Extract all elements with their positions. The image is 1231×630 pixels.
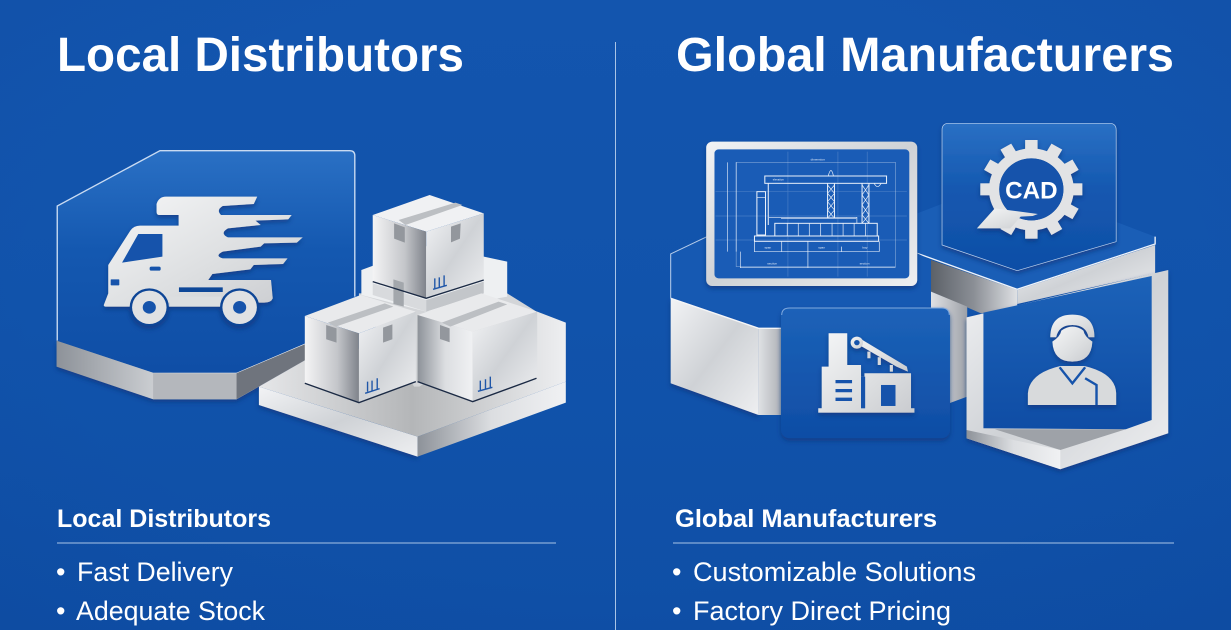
bullet: Adequate Stock: • [56, 596, 65, 626]
bullet: Factory Direct Pricing: Factory Direct Pricing [693, 596, 951, 626]
blueprint labels: elevation [773, 177, 784, 181]
icon: this way up arrows [433, 275, 447, 289]
blueprint labels [764, 158, 870, 266]
icon: CAD gear [977, 140, 1082, 239]
blueprint tablet [706, 142, 917, 286]
left hexagon pedestal [671, 237, 967, 415]
CAD panel [942, 123, 1116, 271]
blueprint drawing [716, 152, 907, 277]
hexagon panel with truck [57, 151, 355, 399]
bullet: Customizable Solutions: Customizable Solutions [693, 557, 976, 587]
icon: this way up arrows [478, 377, 492, 391]
text block: global manufacturers list [672, 505, 1174, 626]
heading: Local Distributors: Local Distributors [57, 29, 464, 82]
icon: delivery truck [104, 197, 303, 326]
upper tier [359, 245, 537, 387]
blueprint labels: bay [862, 245, 868, 249]
blueprint labels: span [818, 245, 825, 249]
icon: this way up arrows [365, 378, 380, 393]
icon: person with headset [1028, 315, 1116, 405]
blueprint labels: section [767, 262, 777, 266]
icon: CAD gear: CAD [1005, 178, 1058, 205]
text block: local distributors list [56, 505, 556, 626]
blueprint labels: span [764, 245, 772, 249]
bullet: Customizable Solutions: • [672, 557, 681, 587]
bullet: Factory Direct Pricing: • [672, 596, 681, 626]
bullet: Fast Delivery: Fast Delivery [77, 557, 233, 587]
box: top [373, 195, 484, 307]
subheading: Local Distributors: Local Distributors [57, 505, 271, 533]
box: lower left [305, 295, 416, 403]
center divider [614, 42, 616, 630]
factory panel [781, 308, 950, 438]
bullet: Adequate Stock: Adequate Stock [76, 596, 265, 626]
illustration: global manufacturers [671, 123, 1168, 469]
illustration: local distributors [57, 151, 566, 457]
right hexagon pedestal [917, 203, 1155, 313]
blueprint labels: dimension [811, 158, 825, 162]
blueprint labels: section [860, 262, 870, 266]
person panel [967, 270, 1168, 469]
subheading: Global Manufacturers: Global Manufacturers [675, 505, 937, 533]
heading: Global Manufacturers: Global Manufacturers [676, 29, 1174, 82]
bullet: Fast Delivery: • [56, 557, 65, 587]
icon: factory [818, 333, 914, 413]
box: lower right [418, 293, 537, 402]
metal base platform [259, 312, 566, 457]
